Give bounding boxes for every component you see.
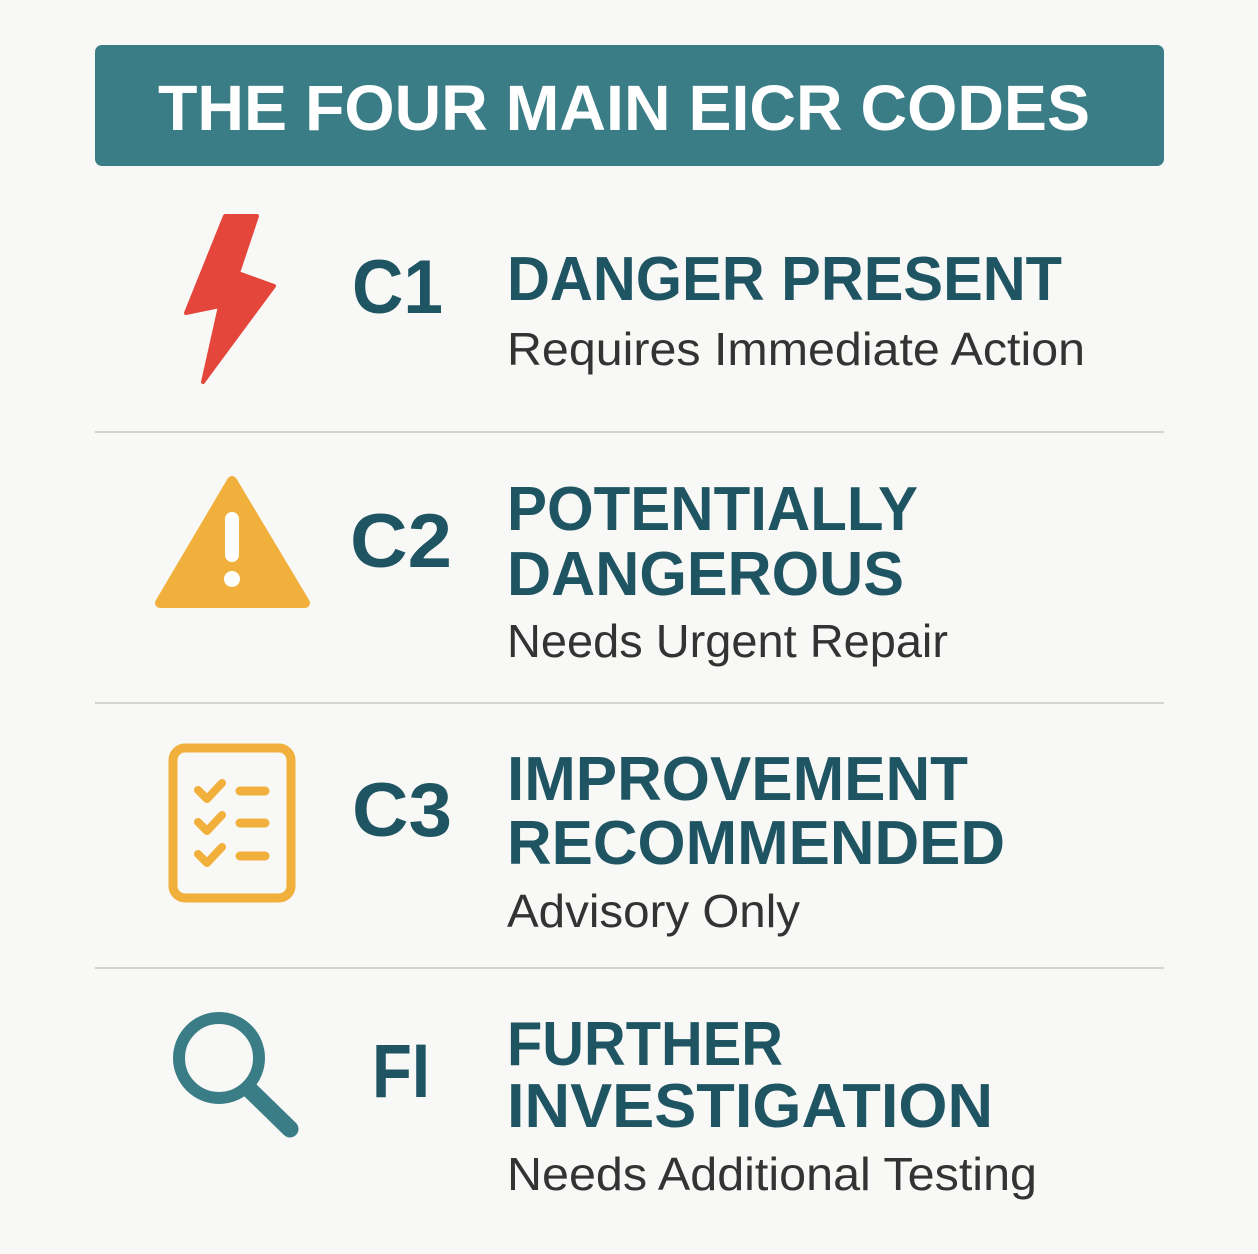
title banner: THE FOUR MAIN EICR CODES	[158, 72, 1090, 144]
code C3: C3	[352, 768, 452, 853]
row: C1 danger present	[186, 216, 1085, 382]
heading: further investigation	[507, 1010, 993, 1141]
heading: improvement recommended	[507, 745, 1005, 878]
row: FI further investigation	[179, 1010, 1037, 1200]
subtitle: Needs Additional Testing	[507, 1148, 1037, 1200]
heading: potentially dangerous: POTENTIALLY	[507, 475, 918, 544]
row: C2 potentially dangerous	[160, 475, 948, 667]
heading: improvement recommended: RECOMMENDED	[507, 809, 1005, 878]
row: C3 improvement recommended	[173, 745, 1005, 937]
heading: further investigation: INVESTIGATION	[507, 1072, 993, 1141]
icon: checklist	[173, 748, 291, 898]
icon: lightning bolt	[186, 216, 274, 382]
heading: improvement recommended: IMPROVEMENT	[507, 745, 968, 814]
code C2: C2	[350, 499, 452, 584]
subtitle: Needs Urgent Repair	[507, 615, 948, 667]
icon: warning triangle	[160, 481, 305, 603]
heading: potentially dangerous: DANGEROUS	[507, 540, 904, 609]
heading: potentially dangerous	[507, 475, 918, 609]
subtitle: Requires Immediate Action	[507, 323, 1085, 375]
code FI: FI	[372, 1029, 430, 1114]
title banner	[95, 45, 1164, 166]
subtitle: Advisory Only	[507, 885, 800, 937]
code C1: C1	[352, 245, 443, 330]
heading: danger present: DANGER PRESENT	[507, 245, 1062, 314]
heading: further investigation: FURTHER	[507, 1010, 783, 1079]
icon: magnifier	[179, 1018, 290, 1129]
